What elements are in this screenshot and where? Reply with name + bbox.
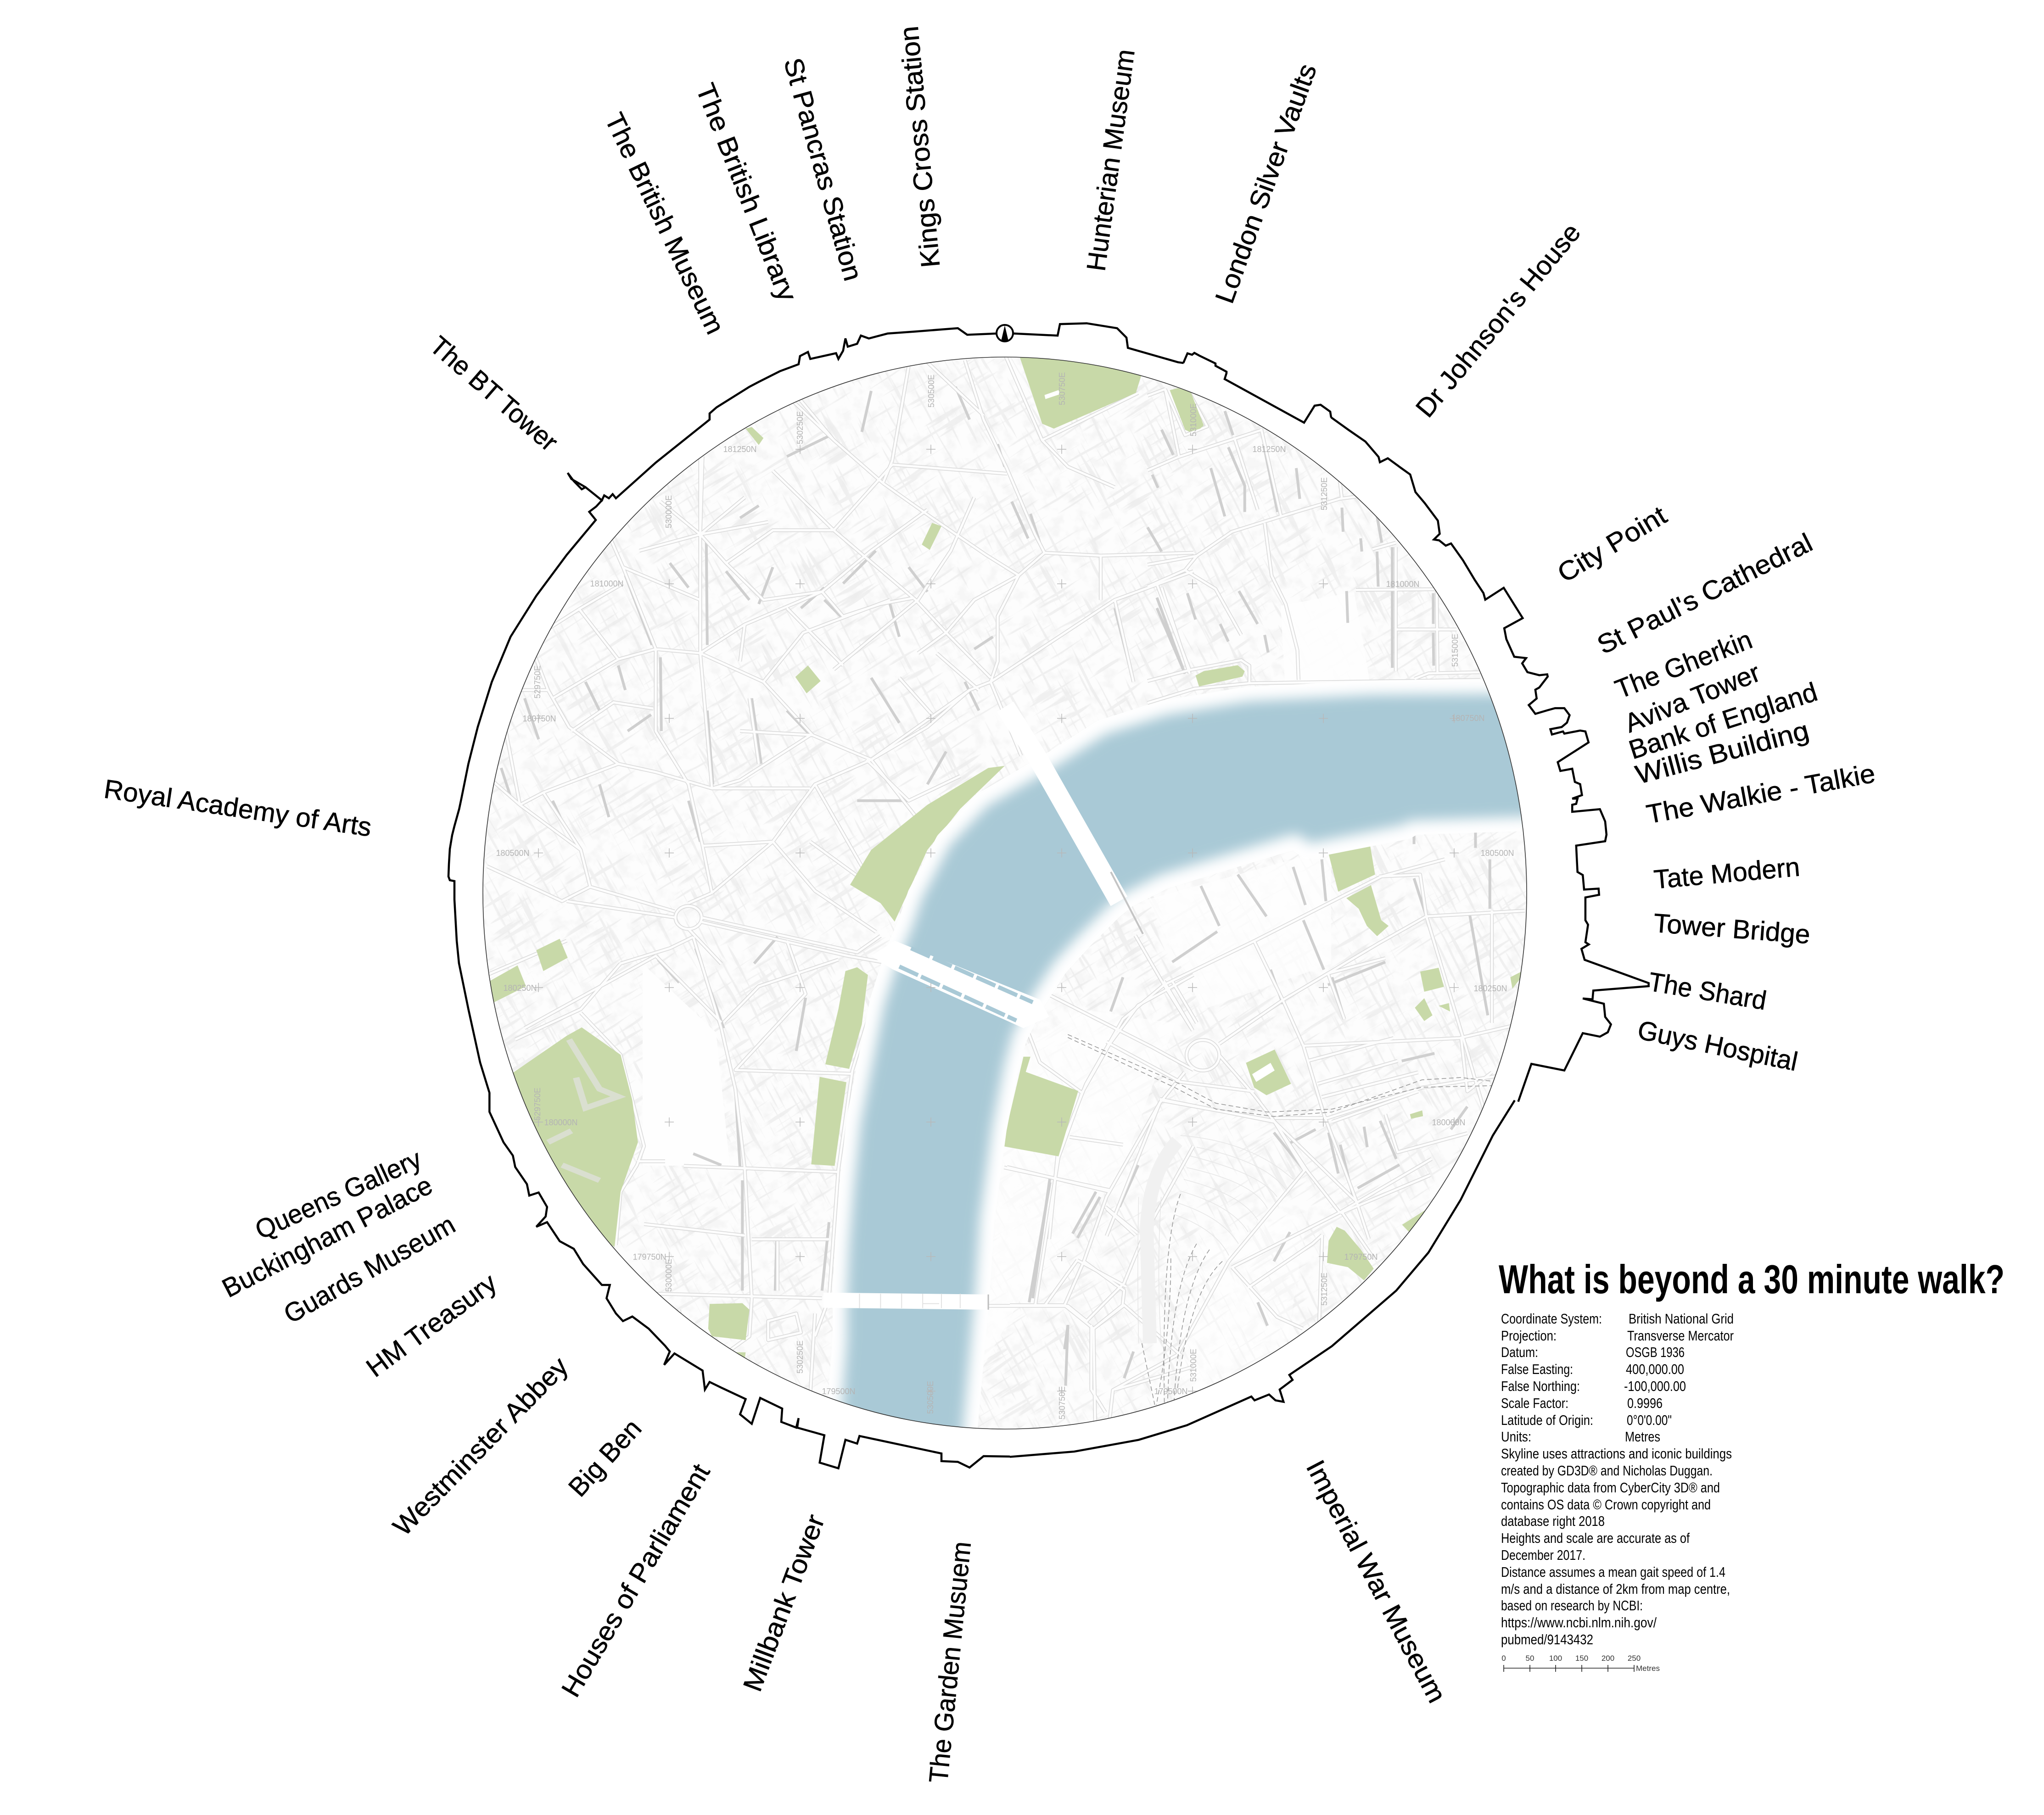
waterloo station tracks	[1068, 1034, 1493, 1405]
grid labels: 530250E	[795, 1340, 805, 1374]
grid labels: 530500E	[927, 374, 936, 408]
landmark labels: Houses of Parliament	[556, 1459, 716, 1702]
circular skyline outline	[448, 323, 1649, 1469]
map metadata and credits: Distance assumes a mean gait speed of 1.4	[1501, 1564, 1725, 1580]
grid labels: 530750E	[1058, 372, 1067, 405]
scale bar: 100	[1549, 1654, 1562, 1663]
landmark labels: Royal Academy of Arts	[102, 774, 374, 843]
map metadata and credits: Projection:	[1501, 1328, 1557, 1344]
building shadows	[501, 387, 1490, 1393]
grid labels: 181000N	[590, 579, 624, 588]
landmark labels: Tower Bridge	[1652, 908, 1811, 949]
grid labels: 180000N	[544, 1118, 578, 1127]
map metadata and credits	[1501, 1311, 1734, 1647]
river thames	[835, 690, 1561, 1469]
grid labels: 529750E	[533, 665, 542, 698]
map metadata and credits: Transverse Mercator	[1627, 1328, 1734, 1344]
landmark labels: Queens Gallery	[251, 1144, 426, 1245]
map metadata and credits: Coordinate System:	[1501, 1311, 1602, 1327]
map metadata and credits: contains OS data © Crown copyright and	[1501, 1497, 1711, 1513]
map metadata and credits: based on research by NCBI:	[1501, 1597, 1643, 1614]
grid labels: 179750N	[633, 1252, 666, 1262]
landmark labels: The Garden Musuem	[924, 1540, 977, 1784]
map metadata and credits: Units:	[1501, 1429, 1531, 1445]
building texture	[483, 357, 1527, 1429]
grid labels: 180750N	[522, 714, 556, 723]
landmark labels: The Walkie - Talkie	[1644, 758, 1877, 830]
grid labels: 181250N	[723, 445, 757, 454]
grid labels: 180250N	[503, 983, 537, 993]
grid labels: 531500E	[1450, 634, 1460, 667]
scale bar: 0	[1501, 1654, 1506, 1663]
map metadata and credits: https://www.ncbi.nlm.nih.gov/	[1501, 1614, 1657, 1631]
grid labels: 179500N	[822, 1387, 856, 1396]
map metadata and credits: Scale Factor:	[1501, 1395, 1568, 1411]
map metadata and credits: -100,000.00	[1624, 1378, 1686, 1394]
grid labels: 529750E	[533, 1088, 542, 1121]
landmark labels: Millbank Tower	[737, 1510, 831, 1696]
map metadata and credits: OSGB 1936	[1626, 1344, 1685, 1360]
landmark labels: Westminster Abbey	[387, 1351, 574, 1541]
map metadata and credits: 0°0'0.00"	[1627, 1412, 1672, 1428]
landmark labels: The British Museum	[599, 108, 730, 339]
map metadata and credits: m/s and a distance of 2km from map centre,	[1501, 1581, 1730, 1597]
map metadata and credits: 0.9996	[1627, 1395, 1663, 1411]
map metadata and credits: pubmed/9143432	[1501, 1631, 1593, 1647]
grid labels: 531250E	[1320, 1273, 1329, 1306]
landmark labels: The Gherkin	[1611, 625, 1756, 704]
map metadata and credits: False Northing:	[1501, 1378, 1580, 1394]
grid labels: 179750N	[1344, 1252, 1378, 1262]
map metadata and credits: 400,000.00	[1626, 1361, 1684, 1377]
grid labels: 180250N	[1473, 984, 1507, 993]
landmark labels: Imperial War Museum	[1300, 1455, 1452, 1708]
grid labels: 180000N	[1432, 1118, 1466, 1127]
grid labels: 531000E	[1189, 403, 1198, 436]
landmark labels: Willis Building	[1632, 715, 1812, 790]
grid labels: 531000E	[1189, 1349, 1198, 1382]
grid labels: 530000E	[664, 495, 673, 528]
green spaces	[487, 354, 1529, 1359]
scale bar: 200	[1602, 1654, 1614, 1663]
map metadata and credits: Latitude of Origin:	[1501, 1412, 1593, 1428]
park paths and buildings in parks	[548, 390, 1275, 1180]
westminster bridge	[823, 1293, 988, 1310]
landmark labels: Guards Museum	[279, 1209, 460, 1329]
landmark labels: Buckingham Palace	[217, 1170, 437, 1303]
map metadata and credits: False Easting:	[1501, 1361, 1573, 1377]
landmark labels: City Point	[1552, 500, 1672, 588]
scale bar	[1501, 1654, 1660, 1673]
grid labels: 180500N	[496, 849, 530, 858]
map metadata and credits: December 2017.	[1501, 1547, 1585, 1563]
landmark labels: Hunterian Museum	[1081, 47, 1141, 273]
landmark labels: Aviva Tower	[1620, 658, 1764, 738]
grid crosses	[483, 357, 1527, 1429]
scale bar: 250	[1628, 1654, 1641, 1663]
map metadata and credits: Heights and scale are accurate as of	[1501, 1530, 1690, 1546]
map outline	[483, 357, 1527, 1429]
grid labels: 530250E	[795, 411, 805, 444]
map metadata and credits: created by GD3D® and Nicholas Duggan.	[1501, 1463, 1713, 1479]
grid labels	[496, 372, 1514, 1419]
scale bar: 150	[1575, 1654, 1588, 1663]
grid labels: 180500N	[1480, 849, 1514, 858]
waterloo bridge	[1005, 707, 1143, 934]
icon: north arrow	[997, 325, 1013, 341]
landmark labels: Dr Johnson's House	[1410, 218, 1586, 423]
grid labels: 181000N	[1386, 580, 1420, 589]
landmark labels: The British Library	[690, 79, 803, 305]
grid labels: 530000E	[664, 1259, 673, 1292]
building shadow streaks	[483, 357, 1526, 1428]
landmark labels: London Silver Vaults	[1210, 60, 1322, 307]
map metadata and credits: Topographic data from CyberCity 3D® and	[1501, 1480, 1720, 1496]
landmark labels: Kings Cross Station	[894, 25, 946, 269]
map metadata and credits: Datum:	[1501, 1344, 1538, 1360]
landmark labels: HM Treasury	[361, 1268, 502, 1383]
map metadata and credits: Metres	[1625, 1429, 1660, 1445]
open white areas	[643, 592, 1370, 1400]
grid labels: 530750E	[1058, 1386, 1067, 1419]
map metadata and credits: database right 2018	[1501, 1513, 1605, 1529]
street map disc	[483, 357, 1526, 1429]
street network	[487, 354, 1525, 1425]
grid labels: 180750N	[1451, 714, 1485, 723]
map metadata and credits: British National Grid	[1629, 1311, 1734, 1327]
grid labels: 181250N	[1252, 445, 1286, 454]
landmark labels: The BT Tower	[424, 330, 564, 457]
river bank margin	[835, 690, 1561, 1469]
landmark labels: Bank of England	[1625, 677, 1821, 765]
landmark labels: Big Ben	[563, 1413, 647, 1502]
landmark labels: The Shard	[1646, 967, 1769, 1016]
landmark labels: St Pancras Station	[778, 55, 868, 284]
grid labels: 179500N	[1154, 1387, 1188, 1396]
grid labels: 531250E	[1320, 477, 1329, 510]
hungerford bridge	[871, 941, 1049, 1028]
landmark labels: Guys Hospital	[1635, 1015, 1800, 1077]
map metadata and credits: Skyline uses attractions and iconic buildings	[1501, 1446, 1732, 1462]
scale bar: 50	[1526, 1654, 1534, 1663]
scale bar: Metres	[1636, 1664, 1660, 1673]
landmark labels: Tate Modern	[1652, 852, 1801, 895]
grid labels: 530500E	[926, 1381, 935, 1414]
landmark labels: St Paul's Cathedral	[1592, 528, 1817, 660]
